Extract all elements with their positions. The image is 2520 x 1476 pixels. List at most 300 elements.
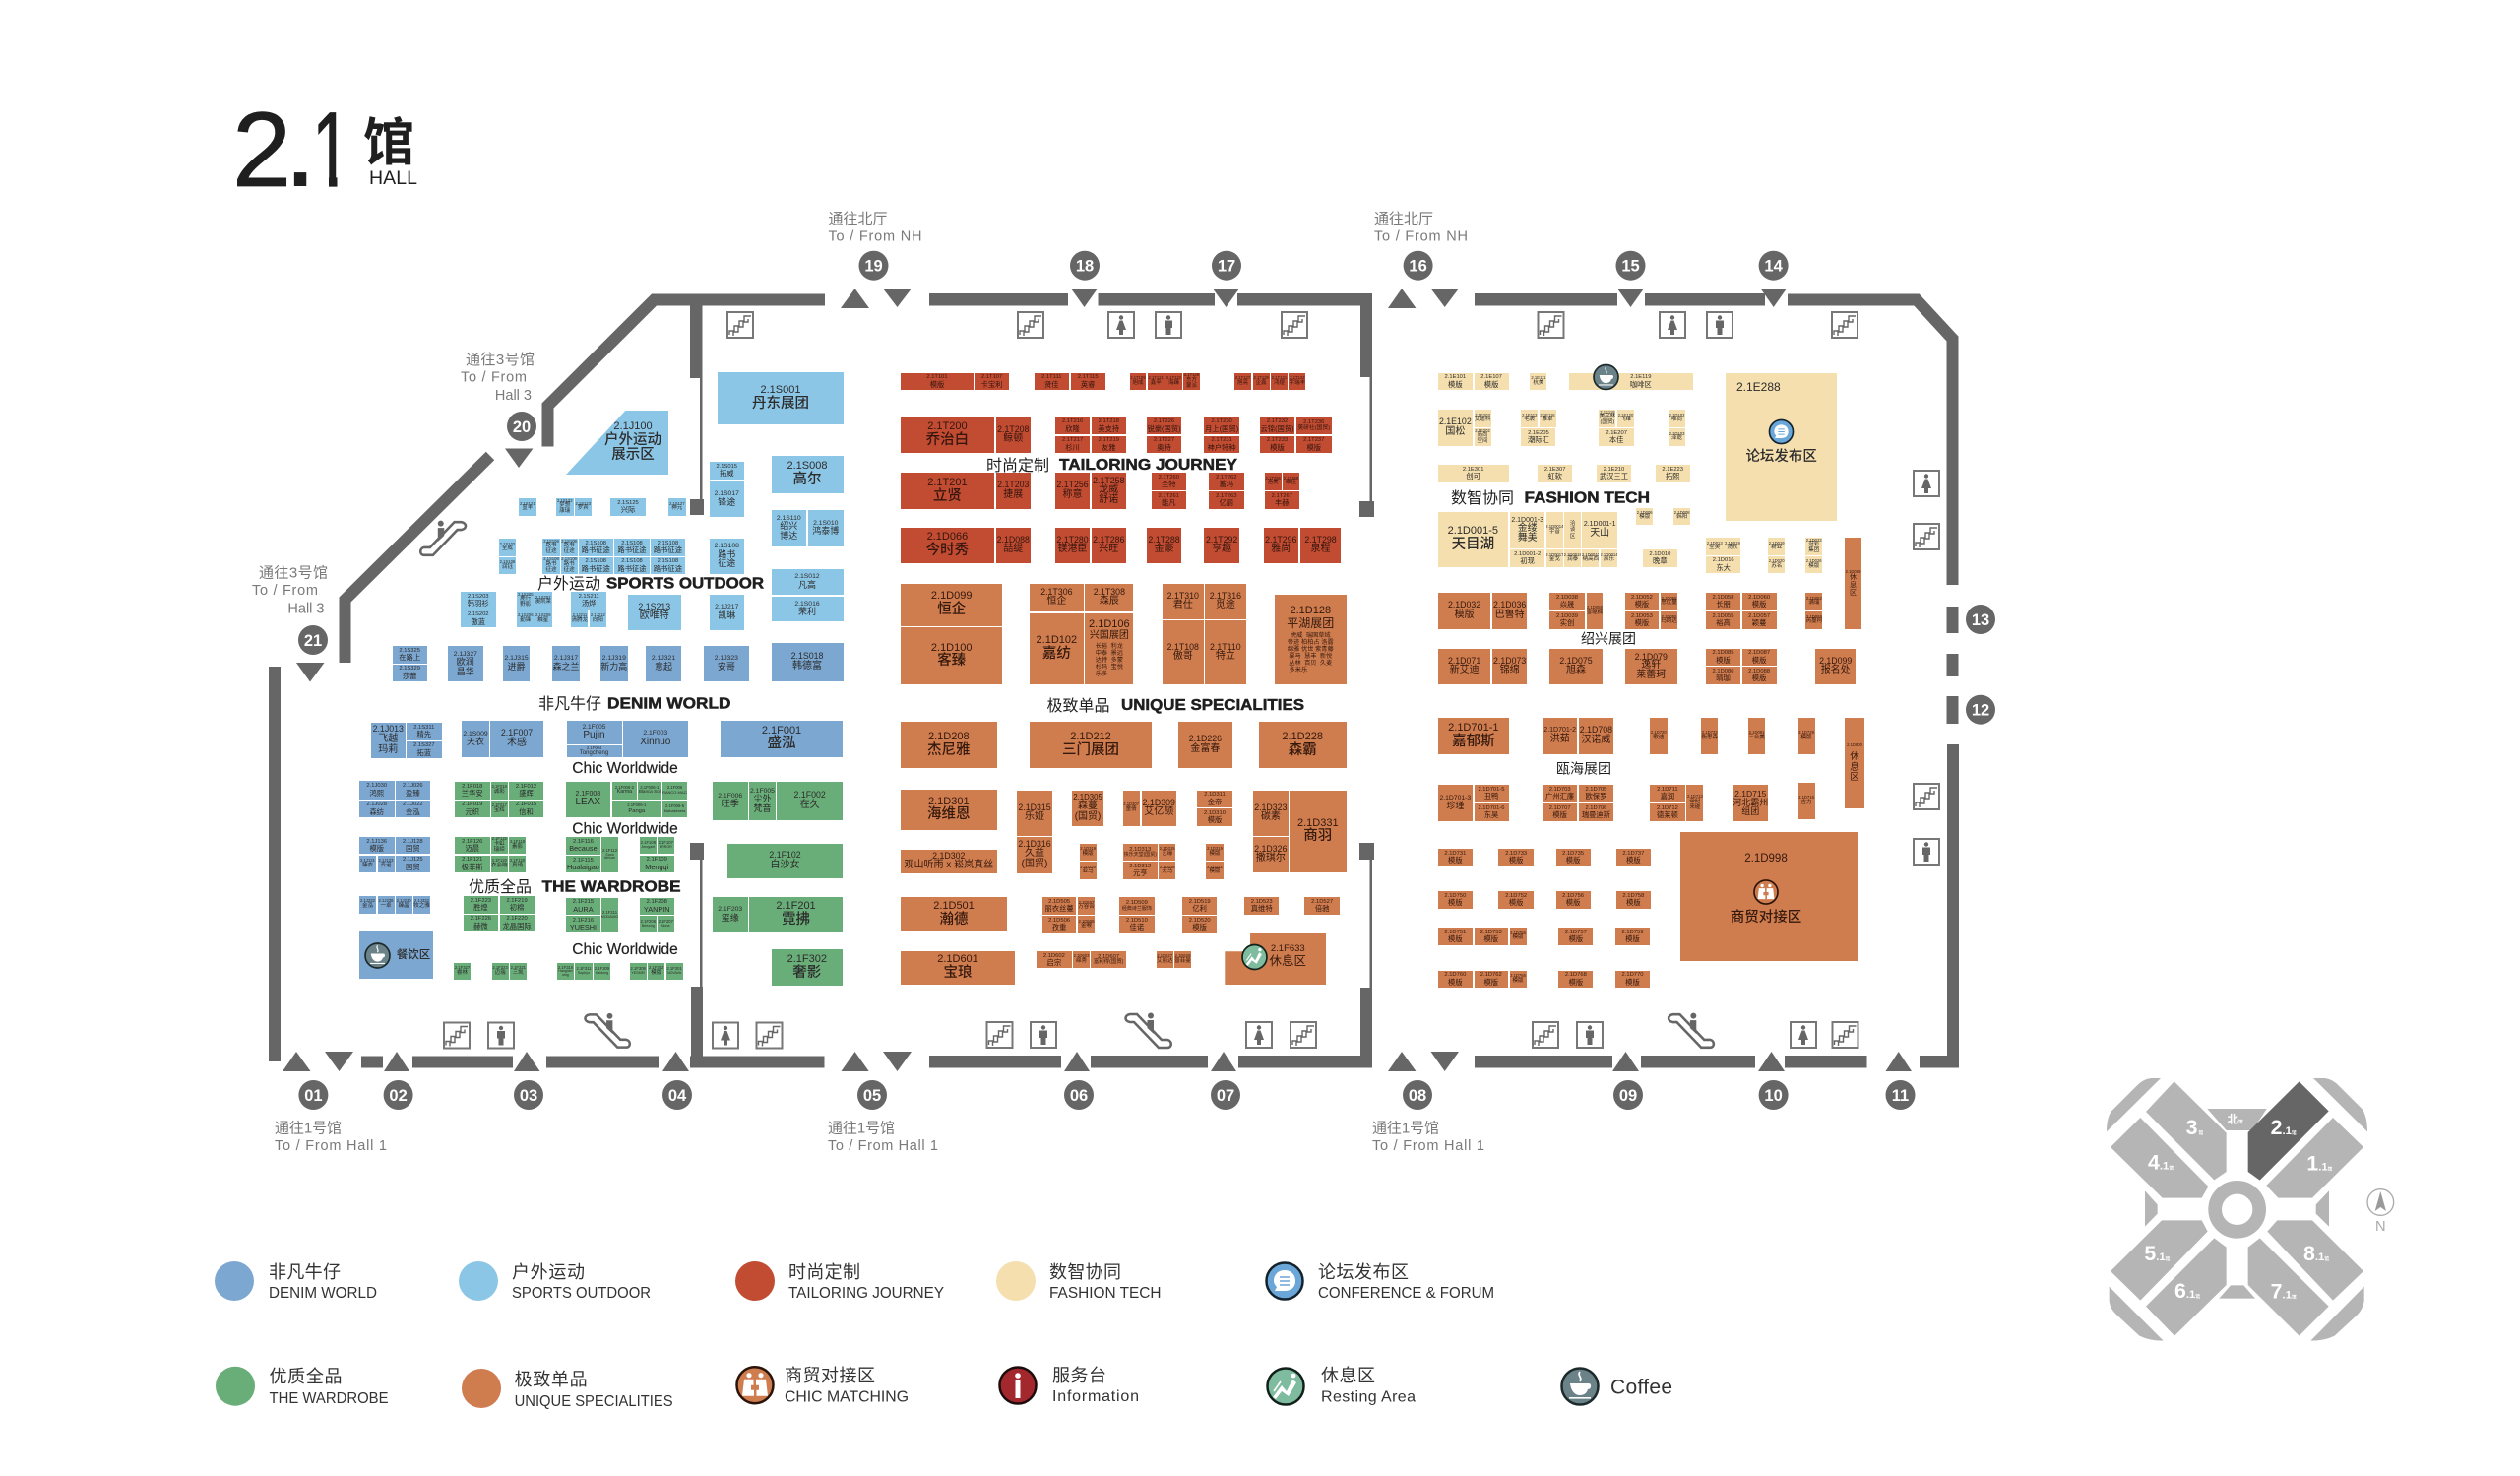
entrance number badges: 01 [304,1087,323,1105]
entrance labels: 通往3号馆 [466,352,535,368]
legend: resting area: 休息区 [1321,1366,1375,1385]
panel: shaoxing and ouhai group booths: 2.1D731 [1444,851,1466,857]
title: 2.1 馆 HALL [237,111,417,187]
panel: sports outdoor booths: 2.1S108 [621,541,643,546]
legend: unique specialities [462,1369,673,1410]
panel: shaoxing and ouhai group booths: 模版 [1566,898,1580,907]
panel: fashion tech booths: 辰乐 [1604,556,1614,562]
panel: denim world booths: 2.1J123 [379,858,393,863]
booth: 2.1D100 客臻 [901,627,1002,684]
panel: unique specialities booths: 2.1T110 [1210,642,1241,652]
compass north marker: N [2375,1219,2386,1235]
booth: 2.1D331 商羽: 2.1D331 [1297,817,1339,829]
panel: tailoring journey booths: 鑫辛 [1151,380,1162,386]
panel: sports outdoor booths: 2.1S108 [621,558,643,564]
icons: stairs [444,312,1939,1048]
panel: shaoxing and ouhai group booths: 模版 [1509,898,1523,907]
panel: fashion tech booths: 2.1E107 [1480,374,1502,380]
heading: fashion tech: FASHION TECH [1524,490,1650,506]
panel: tailoring journey booths: 2.1T101 [926,374,948,380]
booth: 2.1D128 平湖展团: 帝迹 柏柏占 洛露 [1288,639,1334,646]
panel: tailoring journey booths: 2.1T203 [997,480,1029,489]
booth: 2.1F008 LEAX [566,782,610,817]
panel: tailoring journey booths: 喆缇 [1003,544,1023,554]
panel: fashion tech booths: 本佳 [1609,435,1623,444]
panel: fashion tech booths: 2.1E205 [1528,430,1549,436]
panel: tailoring journey booths: 2.1T237 [1303,437,1324,443]
panel: tailoring journey booths: 2.1T260 [1159,475,1179,481]
panel: shaoxing and ouhai group booths: 组团 [1741,806,1759,816]
panel: tailoring journey booths: 捷展 [1003,489,1023,500]
panel: fashion tech booths: 2.1D001-3 [1511,517,1544,524]
panel: denim world booths: 金泓 [406,807,420,816]
panel: the wardrobe booths: 初棉 [510,903,524,912]
icons: women's restroom [713,312,1939,1048]
panel: fashion tech booths: 舞美 [1518,533,1538,544]
panel: tailoring journey booths: 2.1T217 [1062,437,1083,443]
panel: denim world booths: 国贸 [406,863,420,871]
panel: sports outdoor booths: 鹿行 [520,596,531,602]
panel: fashion tech booths: 区 [1570,534,1575,540]
panel: denim world booths: 2.1J236 [379,898,393,903]
panel: sports outdoor booths: 2.1J211 [573,612,587,617]
booth: 2.1D501 瀚德: 瀚德 [939,912,969,928]
panel: denim world booths: 鸿熙 [369,789,384,798]
panel: the wardrobe booths: Hualaigao [567,863,599,871]
panel: sports outdoor booths: 路书 [545,561,557,567]
panel: shaoxing and ouhai group booths: 模版 [1448,934,1463,943]
panel: unique specialities booths: 2.1D519 [1189,899,1211,905]
panel: the wardrobe booths: 2.1F006-1 [640,785,659,790]
panel: denim world booths: 2.1J315 [504,655,529,662]
heading: denim world: 非凡牛仔 [538,695,601,713]
booth: 2.1D102 嘉纺: 嘉纺 [1042,646,1071,662]
panel: shaoxing and ouhai group booths: 2.1D056 [1662,596,1676,601]
panel: shaoxing and ouhai group booths: 2.1D770 [1622,972,1643,978]
panel: unique specialities booths: 2.1D315 [1160,846,1175,851]
panel: shaoxing and ouhai group booths: 模版 [1512,978,1524,984]
booth: 2.1D106 兴国展团 [1085,613,1133,684]
panel: tailoring journey booths: 圣特 [1162,480,1176,488]
panel: unique specialities booths: 2.1D321 [1207,865,1223,869]
panel: tailoring journey booths: 旭亮 [1237,380,1248,386]
panel: fashion tech booths: 2.1D016 [1713,557,1734,563]
panel: tailoring journey booths: 2.1T115 [1078,374,1099,380]
panel: fashion tech booths: 2.1E307 [1544,467,1565,473]
legend: fashion tech: 数智协同 [1049,1262,1121,1282]
booth: 2.1D001-5 天目湖 [1438,512,1508,567]
panel: sports outdoor booths: 2.1S010 [813,520,838,527]
panel: fashion tech booths: 泽乾 [1671,435,1682,441]
panel: denim world booths: 2.1F003 [643,730,667,737]
entrance number badges: 08 [1409,1087,1426,1105]
panel: shaoxing and ouhai group booths: 模版 [1752,600,1766,609]
panel: unique specialities booths: 模版 [1208,815,1222,824]
panel: fashion tech booths: 拓熙 [1666,472,1679,481]
panel: tailoring journey booths: 能凡 [1162,498,1176,507]
panel: fashion tech booths: 2.1D008 [1674,510,1690,515]
panel: sports outdoor booths: 清腾龙 [572,617,588,623]
booth: 2.1S001 丹东展团: 2.1S001 [760,384,800,396]
entrance labels: To / From NH [829,228,921,244]
panel: tailoring journey booths: 丰赫 [1275,498,1290,507]
panel: tailoring journey booths: 鸿煜 [1274,380,1285,386]
panel: denim world booths: 2.1F005 [583,724,605,731]
booth: 2.1D228 森霸 [1259,722,1347,768]
panel: denim world booths [359,643,844,979]
booth: 2.1D128 平湖展团: 绵雅 优世 紫青藤 [1288,646,1334,653]
panel: the wardrobe booths: 胜煌 [473,903,488,912]
panel: sports outdoor booths: 2.1S207 [536,595,551,600]
panel: tailoring journey booths: 鲸顿 [1003,433,1023,444]
panel: denim world booths: 2.1J028 [366,802,387,807]
panel: unique specialities booths: 艾丽达 [1157,958,1172,964]
panel: the wardrobe booths: Beisong [642,924,655,928]
panel: shaoxing and ouhai group booths: 汉诺威 [1581,735,1610,745]
booth: 2.1D089 休息区: 2.1D089 [1846,569,1860,574]
panel: sports outdoor booths: 2.1S202 [468,611,489,617]
entrance labels: 通往1号馆 [275,1121,342,1136]
panel: sports outdoor booths: 梦想 [559,502,570,508]
booth: 2.1S008 高尔 [772,456,843,492]
panel: unique specialities booths: 模版 [1192,923,1207,931]
panel: sports outdoor booths: 征途 [545,548,557,554]
panel: the wardrobe booths: 2.1F015 [516,802,536,807]
panel: sports outdoor booths: 2.1S102 [500,542,515,546]
panel: tailoring journey booths: 2.1T263 [1216,493,1236,499]
panel: shaoxing and ouhai group booths: 模版 [1716,656,1731,665]
panel: unique specialities booths: 模版 [1209,851,1220,857]
panel: the wardrobe booths: 2.1F121 [462,857,482,863]
panel: shaoxing and ouhai group booths: 实创 [1560,618,1574,627]
entrance number badges: 20 [513,418,531,436]
panel: tailoring journey booths: 模版 [1270,443,1285,452]
panel: sports outdoor booths: 2.1S017 [715,490,739,497]
panel: fashion tech booths: 宇音 [1549,529,1560,535]
panel: fashion tech booths: 艾迪科 [1475,417,1490,422]
icon: chic matching [1754,880,1778,904]
panel: sports outdoor booths: 2.1S125 [617,500,639,506]
panel: shaoxing and ouhai group booths: 2.1D759 [1622,930,1643,935]
panel: the wardrobe booths: African [604,856,615,860]
booth: 2.1D066 今时秀: 2.1D066 [927,531,968,543]
panel: unique specialities booths: 2.1D311 [1204,792,1226,798]
panel: tailoring journey booths: 企鑫 [1256,380,1267,386]
panel: tailoring journey booths: 2.1T107 [981,374,1002,380]
booth: 2.1F201 霓拂 [749,897,843,932]
booth: 2.1D128 平湖展团: 平湖展团 [1287,616,1334,630]
panel: unique specialities booths: 启宗 [1047,958,1061,967]
legend: fashion tech: FASHION TECH [1049,1285,1162,1302]
panel: unique specialities booths: (国贸) [1022,859,1047,869]
panel: shaoxing and ouhai group booths: 模版 [1626,856,1641,865]
panel: denim world booths: 2.1J321 [652,655,675,662]
panel: unique specialities booths: 2.1D510 [1126,918,1148,924]
panel: tailoring journey booths: 友雅 [1102,443,1116,452]
entrance labels: 通往1号馆 [1372,1121,1439,1136]
panel: shaoxing and ouhai group booths: 2.1D087 [1748,650,1770,656]
panel: fashion tech booths: 金戈 [1549,556,1560,562]
icon: coffee at dining area [365,943,390,968]
panel: shaoxing and ouhai group booths: 2.1D032 [1448,600,1480,610]
key map of halls: 8.1馆 [2303,1242,2329,1265]
panel: the wardrobe booths: 2.1F006-2 [615,785,634,790]
panel: fashion tech booths: 2.1D019 [1769,541,1785,545]
panel: the wardrobe booths: 2.1F006-1 [627,802,646,807]
panel: tailoring journey booths: 蒙派 [1186,383,1197,389]
panel: fashion tech booths: 空间 [1477,438,1488,444]
panel: denim world booths: 2.1J327 [454,651,477,658]
panel: denim world booths: 在路上 [399,653,420,662]
panel: unique specialities booths: 艺缘 [1162,851,1172,857]
booth: 2.1F102 白沙女 [727,844,843,878]
booth: 2.1D099 恒企 [901,584,1002,626]
panel: denim world booths: 2.1J136 [366,839,387,845]
panel: denim world booths: 2.1J232 [360,898,375,903]
panel: tailoring journey booths: 2.1T268 [1284,476,1298,481]
panel: shaoxing and ouhai group booths: 2.1D735 [1562,851,1584,857]
panel: unique specialities booths: 2.1D319 [1080,846,1096,851]
panel: unique specialities booths: 万谷合 [1078,904,1095,910]
panel: fashion tech booths: 金缕 [1518,523,1538,534]
panel: tailoring journey booths: 海臻 [1168,380,1179,386]
panel: the wardrobe booths: Karma [617,789,632,795]
panel: shaoxing and ouhai group booths: 2.1D079 [1635,652,1668,662]
panel: fashion tech booths: 2.1D001-2 [1514,551,1541,557]
panel: unique specialities booths: 碳素 [1261,811,1281,822]
booth: 2.1F007 术感: 2.1F007 [501,728,533,738]
panel: tailoring journey booths: 泉程 [1311,544,1331,554]
panel: fashion tech booths: 2.1D102 [1670,413,1684,417]
booth: 2.1D800 休息区 [1845,718,1864,808]
panel: shaoxing and ouhai group booths: 晴珈 [1716,674,1731,682]
heading: denim world: DENIM WORLD [607,695,730,713]
booth: 2.1F007 术感 [490,721,543,757]
panel: shaoxing and ouhai group booths: 长朋 [1716,600,1731,609]
booth: 2.1E288 论坛发布区: 论坛发布区 [1745,449,1817,465]
panel: shaoxing and ouhai group booths: 2.1D058 [1587,605,1603,610]
panel: unique specialities booths: 2.1D315 [1018,802,1051,812]
panel: unique specialities booths: 森蔓 [1078,801,1098,811]
booth: 2.1T200 乔治白: 2.1T200 [927,420,968,432]
panel: sports outdoor booths: 2.1S108 [658,558,678,564]
panel: the wardrobe booths: 2.1F206 [641,919,656,924]
panel: shaoxing and ouhai group booths [1438,538,1864,988]
panel: tailoring journey booths: 龙威 [1099,484,1118,495]
booth: 2.1D100 客臻: 2.1D100 [931,642,972,654]
panel: shaoxing and ouhai group booths: 2.1D052 [1631,595,1653,601]
panel: sports outdoor booths: 2.1S108 [585,541,606,546]
panel: unique specialities booths: 佳诺 [1130,923,1144,931]
panel: the wardrobe booths: 2.1F203 [718,906,742,913]
panel: denim world booths: 2.1S009 [463,731,488,738]
booth: 2.1D212 三门展团: 2.1D212 [1070,731,1111,742]
booth: 2.1D331 商羽 [1290,791,1347,872]
entrance number badges: 15 [1621,258,1640,276]
booth: 2.1D998 商贸对接区 [1680,832,1858,961]
panel: the wardrobe booths: 2.1F302 [649,965,663,970]
entrance labels: 通往3号馆 [259,565,328,581]
booth: 2.1D301 海维恩: 海维恩 [927,806,971,822]
legend: conference and forum: CONFERENCE & FORUM [1318,1285,1494,1302]
panel: shaoxing and ouhai group booths: 德莱顿 [1657,810,1678,819]
panel: shaoxing and ouhai group booths: 2.1D069 [1806,614,1822,619]
panel: tailoring journey booths: 锐豪(国贸) [1147,424,1181,433]
entrance labels: 通往北厅 [1374,211,1433,227]
panel: denim world booths: 2.1S325 [399,648,420,654]
panel: tailoring journey booths: 2.1T266 [1266,476,1281,481]
panel: shaoxing and ouhai group booths: 2.1D756 [1562,893,1584,899]
panel: sports outdoor booths: 征途 [564,548,575,554]
panel: unique specialities booths: 2.1D506 [1048,918,1070,924]
panel: shaoxing and ouhai group booths: 2.1D036 [1493,600,1526,610]
panel: tailoring journey booths: 月上(国贸) [1205,424,1238,433]
panel: tailoring journey booths: 美支持 [1098,424,1119,433]
panel: denim world booths: 2.1J319 [602,655,626,662]
panel: the wardrobe booths: Mahakimeta [664,808,685,813]
panel: tailoring journey booths: 卡宝利 [981,380,1002,389]
panel: the wardrobe booths: 迈瑞 [495,970,506,976]
panel: unique specialities booths: 撒琪尔 [1256,853,1286,864]
booth: 2.1D212 三门展团 [1030,722,1152,768]
heading: chic worldwide labels: Chic Worldwide [572,760,678,777]
panel: fashion tech booths: 润泰 [1567,556,1578,562]
panel: denim world booths: 2.1J317 [554,655,578,662]
panel: the wardrobe booths: 2.1F120 [510,858,525,863]
panel: fashion tech booths: 谈 [1570,527,1575,533]
panel: the wardrobe booths: 2.1F219 [506,898,528,904]
legend: conference and forum [1266,1262,1494,1302]
panel: the wardrobe booths: NOVAVA [667,971,681,975]
panel: fashion tech booths: 2.1E120 [1618,413,1633,417]
panel: fashion tech booths: 2.1E207 [1606,430,1627,436]
overlay: titles, labels, icons, entrances [215,111,2394,1409]
panel: sports outdoor booths: 向阳 [593,617,603,623]
panel: unique specialities booths: 2.1T306 [1040,587,1072,597]
heading: the wardrobe: THE WARDROBE [542,878,681,896]
booth: 2.1J100 户外运动展示区: 展示区 [611,447,655,463]
panel: the wardrobe booths: 2.1F107 [659,840,673,845]
panel: denim world booths: 2.1S327 [413,742,435,748]
booth: 2.1D106 兴国展团: 2.1D106 [1089,618,1130,630]
legend: denim world [215,1261,377,1302]
panel: shaoxing and ouhai group booths: 2.1D751 [1444,930,1466,935]
panel: tailoring journey booths: 2.1T122 [1166,375,1181,380]
panel: denim world booths: 天衣 [467,737,484,746]
booth: 2.1D099 恒企: 2.1D099 [931,590,972,602]
entrance number badges: 18 [1076,258,1094,276]
panel: sports outdoor booths: 2.1S108 [585,558,606,564]
booth: 2.1D228 森霸: 森霸 [1289,742,1317,758]
panel: fashion tech booths: 汤欣 [1727,545,1737,550]
booth: 2.1D998 商贸对接区: 2.1D998 [1744,853,1788,865]
title: 2.1 馆 HALL: 1 [312,92,350,210]
panel: denim world booths: 意起 [655,662,672,672]
entrance labels: 通往1号馆 [828,1121,895,1136]
panel: shaoxing and ouhai group booths: 模版 [1483,934,1498,943]
panel: fashion tech booths: 韩阳 [1676,514,1687,520]
heading: unique specialities [1047,697,1304,715]
panel: the wardrobe booths: 2.1F308 [630,966,646,971]
panel: shaoxing and ouhai group booths: 东昊 [1484,810,1498,819]
panel: denim world booths: Tongcheng [580,750,608,756]
panel: the wardrobe booths: 旺季 [722,799,739,808]
panel: unique specialities booths: 2.1T316 [1210,591,1241,601]
panel: shaoxing and ouhai group booths: 模版 [1569,934,1583,943]
legend: coffee [1561,1369,1672,1404]
booth: 2.1S008 高尔: 2.1S008 [788,460,827,472]
booth: 2.1S213 欧唯特 [628,595,681,630]
panel: denim world booths: 牧之雅 [413,903,430,909]
entrance labels: To / From Hall 1 [1372,1138,1484,1154]
panel: sports outdoor booths: 2.1S208 [536,612,551,617]
panel: the wardrobe booths: 极菲斯 [462,863,483,871]
panel: shaoxing and ouhai group booths: 2.1D706 [1585,805,1606,811]
panel: sports outdoor booths: 2.1S015 [716,464,737,470]
panel: shaoxing and ouhai group booths: 巴鲁特 [1495,610,1525,620]
booth: 2.1D128 平湖展团: 虎威 瑞国草绒 [1291,632,1331,639]
panel: sports outdoor booths: 2.1J217 [715,604,738,610]
heading: chic worldwide labels [572,760,678,958]
panel: fashion tech booths: 天山 [1590,528,1609,539]
panel: unique specialities booths: 久益 [1025,848,1044,859]
panel: shaoxing and ouhai group booths: 2.1D055 [1662,614,1676,619]
booth: 2.1D601 宝琅: 2.1D601 [937,953,978,965]
panel: shaoxing and ouhai group booths: 2.1D701-6 [1478,805,1505,811]
booth: 2.1S213 欧唯特: 欧唯特 [640,610,669,621]
panel: shaoxing and ouhai group booths: 2.1D073 [1493,656,1526,666]
panel: the wardrobe booths: AURA [573,905,594,914]
heading: fashion tech [1451,489,1650,507]
legend: resting area [1268,1366,1416,1406]
booth: 2.1F002 在久: 2.1F002 [794,790,826,800]
panel: shaoxing and ouhai group booths: 2.1D707 [1549,805,1571,811]
entrance number badges: 13 [1972,611,1989,629]
heading: tailoring journey [986,457,1237,475]
entrance number badges: 02 [389,1087,408,1105]
panel: shaoxing and ouhai group booths: 2.1D053 [1631,613,1653,619]
booth: 2.1T201 立贤 [901,473,994,509]
panel: fashion tech booths: 2.1D020 [1769,558,1785,563]
booth: 2.1D089 休息区 [1845,538,1861,629]
panel: sports outdoor booths: 显丰 [522,505,533,511]
booth: 2.1D128 平湖展团: 粟马 慧丰 新悦 [1289,653,1332,660]
booth: 2.1T201 立贤: 立贤 [933,488,962,504]
panel: denim world booths: 2.1S329 [399,666,420,672]
panel: shaoxing and ouhai group booths: 2.1D086 [1713,669,1733,674]
panel: shaoxing and ouhai group booths: 丑鸭 [1484,792,1498,801]
panel: sports outdoor booths: 路书 [718,549,735,559]
panel: tailoring journey booths: 2.1T230 [1211,418,1232,424]
panel: the wardrobe booths: 2.1F112 [602,848,617,853]
booth: 2.1F302 奢影: 奢影 [792,965,821,981]
booth: 2.1D106 兴国展团: 长裕 利龙 [1096,643,1123,650]
panel: the wardrobe booths: 衣会响 [491,863,508,868]
heading: denim world [538,695,730,713]
panel: the wardrobe booths: 盛辉 [519,789,534,798]
panel: shaoxing and ouhai group booths: 模版 [1569,978,1583,987]
panel: unique specialities booths: 2.1D319 [1207,846,1223,851]
entrance number badges [298,251,1995,1110]
panel: the wardrobe booths: 2.1F016 [492,784,507,789]
panel: tailoring journey booths: 2.1T127 [1235,375,1250,380]
panel: unique specialities booths: 2.1D508 [1079,919,1094,924]
heading: tailoring journey: 时尚定制 [986,457,1049,475]
key map of halls: 2.1馆 [2271,1116,2297,1139]
panel: denim world booths: 昌华 [457,667,474,676]
panel: fashion tech booths: 2.1E223 [1662,467,1683,473]
heading: the wardrobe [469,878,681,896]
